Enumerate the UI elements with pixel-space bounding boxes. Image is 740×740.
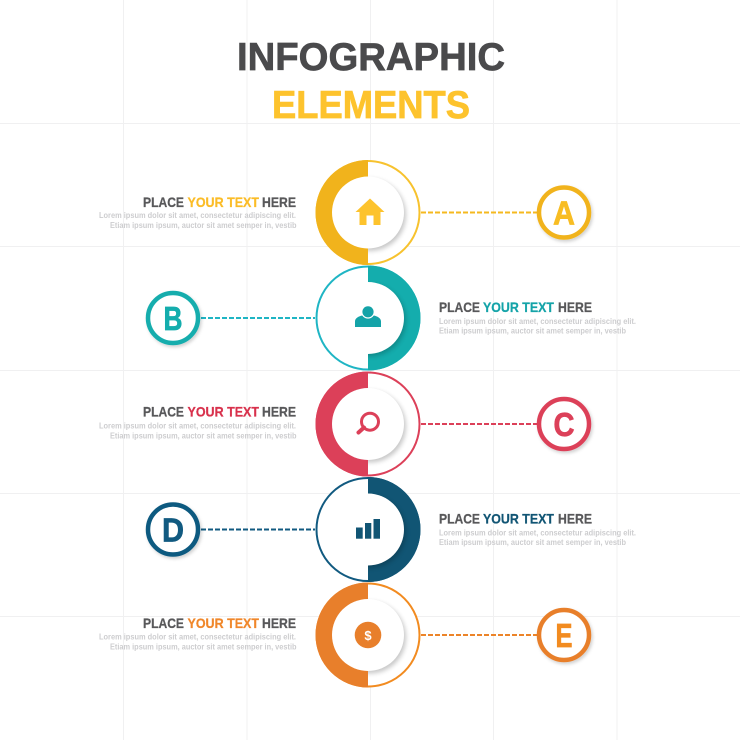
badge C: [539, 399, 589, 449]
icon: magnifier: [358, 413, 378, 432]
text block E: Etiam ipsum ipsum, auctor sit amet semper in, vestib: [110, 642, 297, 652]
badge D: D: [162, 512, 184, 548]
step E: dollar: [99, 582, 589, 688]
text block D: YOUR TEXT: [483, 510, 554, 526]
text block B: PLACE: [439, 299, 480, 315]
text block B: [439, 299, 636, 336]
text block D: PLACE: [439, 510, 480, 526]
step C: search: [99, 372, 589, 477]
badge E: [539, 610, 589, 660]
icon: bar chart: [356, 519, 380, 539]
badge B: [148, 293, 198, 343]
text block C: PLACE: [143, 404, 184, 420]
circle A: [316, 160, 420, 265]
text block C: Etiam ipsum ipsum, auctor sit amet semper in, vestib: [110, 432, 297, 440]
step B: person: [148, 266, 636, 370]
icon: person: [355, 305, 381, 327]
text block A: HERE: [262, 194, 296, 210]
badge D: [148, 504, 198, 554]
text block C: Lorem ipsum dolor sit amet, consectetur adipiscing elit.: [99, 422, 296, 430]
text block C: YOUR TEXT: [188, 404, 259, 420]
title: ELEMENTS: [272, 84, 470, 127]
text block A: [99, 194, 297, 230]
text block A: YOUR TEXT: [188, 194, 259, 210]
circle B: [316, 266, 420, 370]
text block E: YOUR TEXT: [188, 615, 259, 631]
text block A: Etiam ipsum ipsum, auctor sit amet semper in, vestib: [110, 221, 297, 230]
badge A: [539, 188, 589, 238]
badge C: C: [554, 406, 574, 443]
icon: dollar coin: $: [364, 628, 372, 643]
step D: chart: [148, 477, 636, 582]
dashed connector E: [421, 634, 537, 636]
text block C: [99, 404, 297, 440]
circle D: [316, 477, 420, 582]
dashed connector D: [201, 528, 315, 530]
step A: home: [99, 160, 589, 265]
text block D: Lorem ipsum dolor sit amet, consectetur adipiscing elit.: [439, 528, 636, 538]
text block C: HERE: [262, 404, 296, 420]
badge A: A: [553, 194, 575, 232]
text block E: HERE: [262, 615, 296, 631]
dashed connector C: [421, 423, 537, 425]
text block E: Lorem ipsum dolor sit amet, consectetur adipiscing elit.: [99, 632, 296, 642]
text block B: Lorem ipsum dolor sit amet, consectetur adipiscing elit.: [439, 317, 636, 326]
circle C: [316, 372, 420, 477]
text block B: HERE: [558, 299, 592, 315]
text block D: Etiam ipsum ipsum, auctor sit amet semper in, vestib: [439, 538, 626, 547]
title: INFOGRAPHIC: [237, 36, 505, 79]
title: [237, 36, 505, 127]
text block B: YOUR TEXT: [483, 299, 554, 315]
dashed connector A: [421, 212, 537, 214]
badge B: B: [164, 300, 182, 337]
badge E: E: [556, 617, 572, 654]
text block E: [99, 615, 297, 652]
text block D: HERE: [558, 510, 592, 526]
text block A: PLACE: [143, 194, 184, 210]
text block B: Etiam ipsum ipsum, auctor sit amet semper in, vestib: [439, 326, 626, 336]
dashed connector B: [201, 317, 315, 319]
icon: dollar coin: [355, 622, 381, 648]
text block D: [439, 510, 636, 547]
text block A: Lorem ipsum dolor sit amet, consectetur adipiscing elit.: [99, 211, 296, 220]
icon: home: [356, 198, 384, 225]
circle E: [316, 582, 420, 688]
text block E: PLACE: [143, 615, 184, 631]
